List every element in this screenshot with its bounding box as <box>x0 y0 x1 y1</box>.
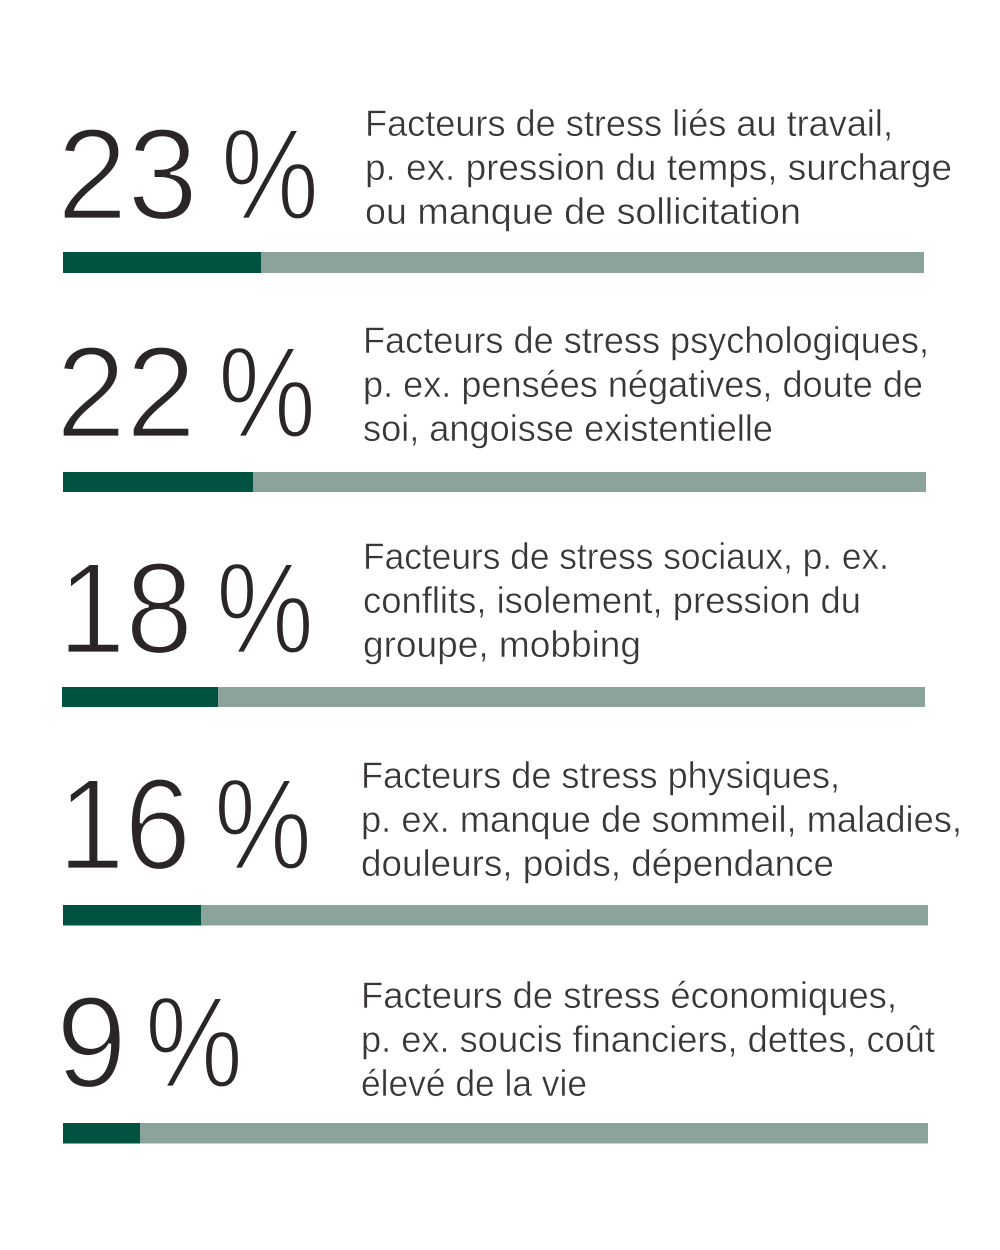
description: work stress: Facteurs de stress liés au travail, <box>365 103 893 144</box>
percentage: 9 %: 9 <box>56 969 127 1115</box>
description: economic stress <box>361 975 936 1104</box>
percentage: 22 %: 22 <box>56 319 196 465</box>
percentage: 16 % <box>58 751 312 897</box>
description: work stress <box>365 103 952 232</box>
description: psychological stress: soi, angoisse existentielle <box>363 408 773 449</box>
percentage: 18 %: % <box>216 535 314 681</box>
panel: social stress 18% <box>58 535 925 707</box>
description: physical stress: Facteurs de stress physiques, <box>361 755 840 796</box>
percentage: 18 %: 18 <box>58 535 193 681</box>
description: social stress: groupe, mobbing <box>363 624 641 665</box>
panel: work stress 23% <box>57 101 952 273</box>
percentage: 23 %: 23 <box>57 101 198 247</box>
progress bar: 18% <box>62 687 925 707</box>
description: psychological stress: Facteurs de stress psychologiques, <box>363 320 929 361</box>
progress bar: 22% <box>63 472 926 492</box>
progress bar: 23% <box>63 252 924 273</box>
percentage: 23 %: % <box>221 101 319 247</box>
percentage: 23 % <box>57 101 319 247</box>
description: work stress: ou manque de sollicitation <box>365 191 801 232</box>
panel: physical stress 16% <box>58 751 962 926</box>
description: economic stress: élevé de la vie <box>361 1063 587 1104</box>
panel: psychological stress 22% <box>56 319 929 492</box>
description: physical stress <box>361 755 962 884</box>
description: social stress <box>363 536 889 665</box>
panel: economic stress 9% <box>56 969 936 1144</box>
description: physical stress: p. ex. manque de sommeil, maladies, <box>361 799 962 840</box>
description: psychological stress <box>363 320 929 449</box>
percentage: 16 %: 16 <box>58 751 191 897</box>
percentage: 16 %: % <box>214 751 312 897</box>
description: economic stress: p. ex. soucis financiers, dettes, coût <box>361 1019 936 1060</box>
percentage: 22 %: % <box>218 319 316 465</box>
percentage: 22 % <box>56 319 316 465</box>
description: psychological stress: p. ex. pensées négatives, doute de <box>363 364 923 405</box>
percentage: 9 %: % <box>145 969 243 1115</box>
progress bar: 16% <box>63 905 928 926</box>
description: social stress: conflits, isolement, pression du <box>363 580 861 621</box>
description: social stress: Facteurs de stress sociaux, p. ex. <box>363 536 889 577</box>
description: work stress: p. ex. pression du temps, surcharge <box>365 147 952 188</box>
progress bar: 9% <box>63 1123 928 1144</box>
description: physical stress: douleurs, poids, dépendance <box>361 843 834 884</box>
description: economic stress: Facteurs de stress économiques, <box>361 975 897 1016</box>
percentage: 18 % <box>58 535 314 681</box>
percentage: 9 % <box>56 969 243 1115</box>
